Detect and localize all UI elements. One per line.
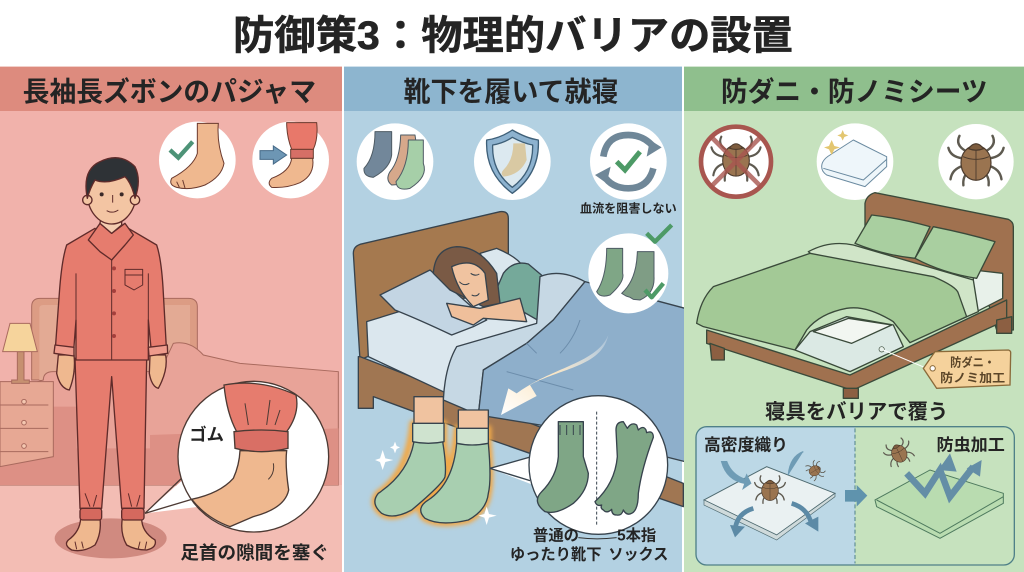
panel header — [684, 67, 1024, 111]
sparkles — [375, 442, 497, 525]
fold — [808, 243, 978, 342]
pillows — [855, 215, 930, 258]
high-density weave: 高密度織り — [704, 435, 788, 455]
caption: 足首の隙間を塞ぐ — [180, 542, 329, 563]
labels: sock types — [510, 527, 668, 563]
panel header: 靴下を履いて就寝 — [403, 76, 618, 107]
circulation icon — [590, 123, 667, 200]
label: gom: ゴム — [189, 425, 224, 445]
labels: sock types: ソックス — [608, 546, 668, 563]
duvet fold — [443, 273, 585, 415]
panel: anti-mite sheets — [684, 67, 1024, 572]
mattress — [367, 293, 547, 393]
shirt — [55, 228, 167, 360]
bed with barrier sheet — [697, 193, 1013, 398]
clean sheet icon — [817, 123, 893, 200]
foot icons — [159, 122, 329, 198]
woman shirt — [488, 263, 543, 323]
frame — [707, 300, 1007, 390]
neck — [100, 213, 122, 233]
pillows — [480, 248, 523, 287]
panel header: 防ダニ・防ノミシーツ — [721, 76, 988, 107]
treatment tag: 防ノミ加工 — [940, 370, 1005, 385]
subheading: 寝具をバリアで覆う — [765, 400, 948, 423]
shadow — [55, 518, 167, 558]
treatment tag: 防ダニ・ — [950, 355, 995, 370]
insect-repellent finish — [875, 436, 1005, 538]
treatment tag — [923, 350, 1011, 388]
insect-repellent finish: 防虫加工 — [936, 436, 1005, 455]
high-density weave — [704, 435, 835, 540]
woman head — [433, 247, 500, 307]
panel header: 長袖長ズボンのパジャマ — [23, 76, 316, 107]
sock variety icon — [357, 123, 433, 200]
title: 防御策3：物理的バリアの設置 — [233, 14, 793, 58]
bed frame and headboard — [353, 212, 508, 360]
sheet — [973, 270, 1003, 313]
feet — [66, 518, 155, 551]
magnified ankle callout — [145, 381, 329, 532]
panel background — [344, 67, 682, 572]
caption: circulation: 血流を阻害しない — [580, 201, 677, 216]
panel header — [0, 67, 342, 111]
no-mite icon — [701, 127, 771, 197]
man in pajamas — [54, 158, 168, 558]
labels: sock types: 普通の — [533, 527, 579, 545]
sock comparison callout — [490, 396, 668, 534]
sleeping woman in bed — [353, 212, 685, 507]
labels: sock types: ゆったり靴下 — [510, 545, 601, 563]
panel background — [0, 67, 342, 572]
trousers — [75, 358, 147, 508]
comparison box — [696, 427, 1014, 565]
headboard — [865, 193, 1013, 330]
mite icon — [938, 124, 1014, 199]
background bedroom — [0, 298, 342, 572]
duvet — [478, 282, 685, 462]
hands — [57, 355, 166, 390]
panel: pajamas — [0, 67, 342, 572]
warm flow arrow — [501, 335, 608, 415]
head — [87, 163, 136, 224]
panel header — [344, 67, 682, 111]
sock pair icon — [588, 225, 672, 313]
labels: sock types: 5本指 — [617, 527, 656, 545]
shield icon — [474, 123, 551, 200]
warm socks on feet — [375, 397, 497, 525]
panel background — [684, 67, 1024, 572]
woman arm — [447, 298, 527, 325]
blanket — [697, 253, 967, 350]
arrow between methods — [845, 485, 867, 507]
mattress — [795, 317, 903, 372]
panel: socks — [344, 67, 685, 572]
